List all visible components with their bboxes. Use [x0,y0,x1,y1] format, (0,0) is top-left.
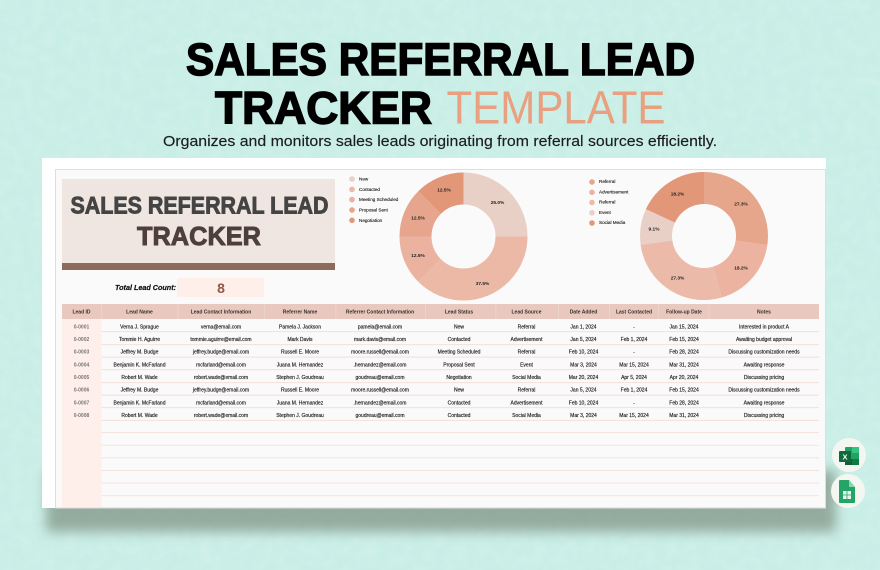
table [62,304,819,508]
row 8: Mar 15, 2024 [619,413,649,419]
donut chart: lead source: 9.1% [649,226,660,232]
row 1: Pamela J. Jackson [279,324,321,330]
donut chart: lead status: 37.5% [476,281,490,287]
row 1: New [454,324,464,330]
row 5: Apr 5, 2024 [621,375,647,381]
row 3: Meeting Scheduled [438,350,481,356]
row 5: Discussing pricing [744,375,784,381]
row 3: Russell E. Moore [281,350,319,356]
row 3 [74,350,800,356]
legend: lead status: Proposal Sent [359,208,389,212]
row 5: Robert M. Wade [121,375,158,381]
donut chart: lead source: 18.2% [671,192,685,198]
row 6: Referral [518,388,535,394]
donut chart: lead source: 27.3% [671,276,685,282]
row 4: Mar 31, 2024 [669,362,699,368]
header row: Lead Name [126,310,153,316]
row 1: pamela@email.com [358,324,402,330]
donut chart: lead status: 12.5% [411,216,426,222]
row 7: Feb 28, 2024 [669,400,699,406]
row 7: 0-0007 [74,400,89,406]
row 7: Feb 10, 2024 [569,400,598,406]
row 2: Contacted [448,337,471,343]
row 8: robert.wade@email.com [194,413,248,419]
row 5: Negotiation [446,375,472,381]
row 2: Mark Davis [287,337,313,343]
row 7: Contacted [448,400,471,406]
row 2 [74,337,792,343]
row 2: tommie.aguirre@email.com [190,337,252,343]
row 7: Advertisement [511,400,543,406]
row 8: Mar 3, 2024 [570,413,597,419]
icon: excel [832,438,866,472]
title: TRACKER [215,82,432,134]
total lead count [115,278,264,297]
row 8: Robert M. Wade [121,413,158,419]
legend: lead source: Event [599,210,611,215]
row 5: robert.wade@email.com [194,375,248,381]
donut chart: lead status: 25.0% [491,200,505,206]
legend: lead source: Referral [599,179,615,184]
row 7: Awaiting response [744,400,785,406]
row 4: Mar 15, 2024 [619,362,649,368]
row 8: Stephen J. Goudreau [276,413,324,419]
row 1: Verna J. Sprague [120,324,159,330]
row 8: 0-0008 [74,413,89,419]
row 6: jeffrey.budge@email.com [192,388,249,394]
row 8: Contacted [448,413,471,419]
row 3: Jeffrey M. Budge [121,350,159,356]
row 7: Benjamin K. McFarland [114,400,166,406]
title: SALES REFERRAL LEAD [186,34,695,85]
row 2: 0-0002 [74,337,89,343]
row 5: Mar 20, 2024 [569,375,598,381]
legend: lead source: Advertisement [599,189,629,194]
row 8: goudreau@email.com [356,413,404,419]
title [186,34,695,134]
row 8: Discussing pricing [744,413,784,419]
row 4: 0-0004 [74,362,89,368]
header row: Referrer Contact Information [346,310,414,316]
row 3: jeffrey.budge@email.com [192,350,249,356]
row 6: Russell E. Moore [281,388,319,394]
legend: lead status: Meeting Scheduled [359,197,399,202]
row 4 [74,362,785,368]
row 4: Juana M. Hernandez [277,362,324,368]
row 3: Feb 10, 2024 [569,350,598,356]
header row: Last Contacted [616,310,652,316]
row 6: Feb 15, 2024 [669,388,699,394]
legend: lead source: Referral [599,200,615,204]
row 4: mcfarland@email.com [196,362,246,368]
heading block: SALES REFERRAL LEAD [70,192,328,220]
row 6: moore.russell@email.com [351,388,409,394]
header row: Notes [757,310,771,316]
total lead count: 8 [217,280,225,296]
donut chart: lead source: 18.2% [734,266,749,272]
header row: Follow-up Date [666,310,702,316]
row 1: - [633,324,635,330]
row 3: Referral [518,350,535,356]
row 4: .hernandez@email.com [354,362,406,368]
id column background [62,319,102,508]
row 1: Jan 1, 2024 [570,324,597,330]
header row: Lead Contact Information [191,310,251,316]
row 5: 0-0005 [74,375,89,381]
row 3: moore.russell@email.com [351,350,409,356]
row 8: Mar 31, 2024 [669,413,699,419]
row 4: Event [520,362,533,368]
donut chart: lead status: 12.5% [437,188,452,194]
row 7 [74,400,785,406]
header row: Lead Status [445,310,473,316]
row 7: Juana M. Hernandez [277,400,324,406]
row 3: Discussing customization needs [728,350,800,356]
title: TEMPLATE [446,82,666,134]
row 6: New [454,388,464,394]
row 2: Jan 5, 2024 [570,337,597,343]
row 4: Proposal Sent [443,362,475,368]
row 6: Feb 1, 2024 [621,388,648,394]
row 5: Stephen J. Goudreau [276,375,324,381]
subtitle: Organizes and monitors sales leads originating from referral sources efficiently. [163,133,717,150]
panel: spreadsheet preview [42,158,826,508]
legend: lead status: Contacted [359,187,380,192]
row 1: Interested in product A [739,324,790,330]
row 3: 0-0003 [74,350,89,356]
row 1: verna@email.com [201,324,241,330]
row 7: mcfarland@email.com [196,400,246,406]
row 6: Jan 5, 2024 [570,388,597,394]
row 8: Social Media [512,413,541,419]
row 8 [74,413,784,419]
row 3: Feb 28, 2024 [669,350,699,356]
header row: Date Added [570,310,597,316]
row 7: - [633,400,635,406]
header row [62,304,819,319]
donut chart: lead status [411,188,512,287]
header row: Referrer Name [283,310,317,316]
row 1: 0-0001 [74,324,89,330]
row 7: .hernandez@email.com [354,400,406,406]
panel shadow [46,470,836,532]
row 2: Feb 15, 2024 [669,337,699,343]
donut chart: lead status: 12.5% [411,253,426,259]
row 5: Apr 20, 2024 [670,375,699,381]
row 5: goudreau@email.com [356,375,404,381]
header row: Lead Source [511,310,542,316]
legend: lead status: Negotiation [359,218,383,223]
header row: Lead ID [72,310,91,316]
legend: lead source [589,179,629,226]
row 2: Feb 1, 2024 [621,337,648,343]
row 1: Jan 15, 2024 [670,324,699,330]
row 1: Referral [518,324,535,330]
donut chart: lead source [649,188,752,284]
row 6 [74,388,800,394]
row 4: Mar 3, 2024 [570,362,597,368]
row 5 [74,375,784,381]
donut chart: lead source: 27.3% [734,202,749,208]
icon: excel: X [842,452,848,462]
row 4: Awaiting response [744,362,785,368]
row 6: Jeffrey M. Budge [121,388,159,394]
row 6: Discussing customization needs [728,388,800,394]
total lead count: Total Lead Count: [115,285,176,292]
heading block: TRACKER [137,221,261,251]
row 3: - [633,350,635,356]
row 2: Awaiting budget approval [736,337,792,343]
row 5: Social Media [512,375,541,381]
row 2: Tommie H. Aguirre [119,337,160,343]
legend: lead status [349,176,399,223]
row 2: Advertisement [511,337,543,343]
legend: lead source: Social Media [599,220,626,225]
row 1 [74,324,790,330]
row lines [62,331,819,508]
row 6: 0-0006 [74,388,89,394]
icon: google sheets [831,474,865,508]
legend: lead status: New [359,176,369,182]
heading block [62,179,335,270]
row 4: Benjamin K. McFarland [114,362,166,368]
row 2: mark.davis@email.com [354,337,406,343]
